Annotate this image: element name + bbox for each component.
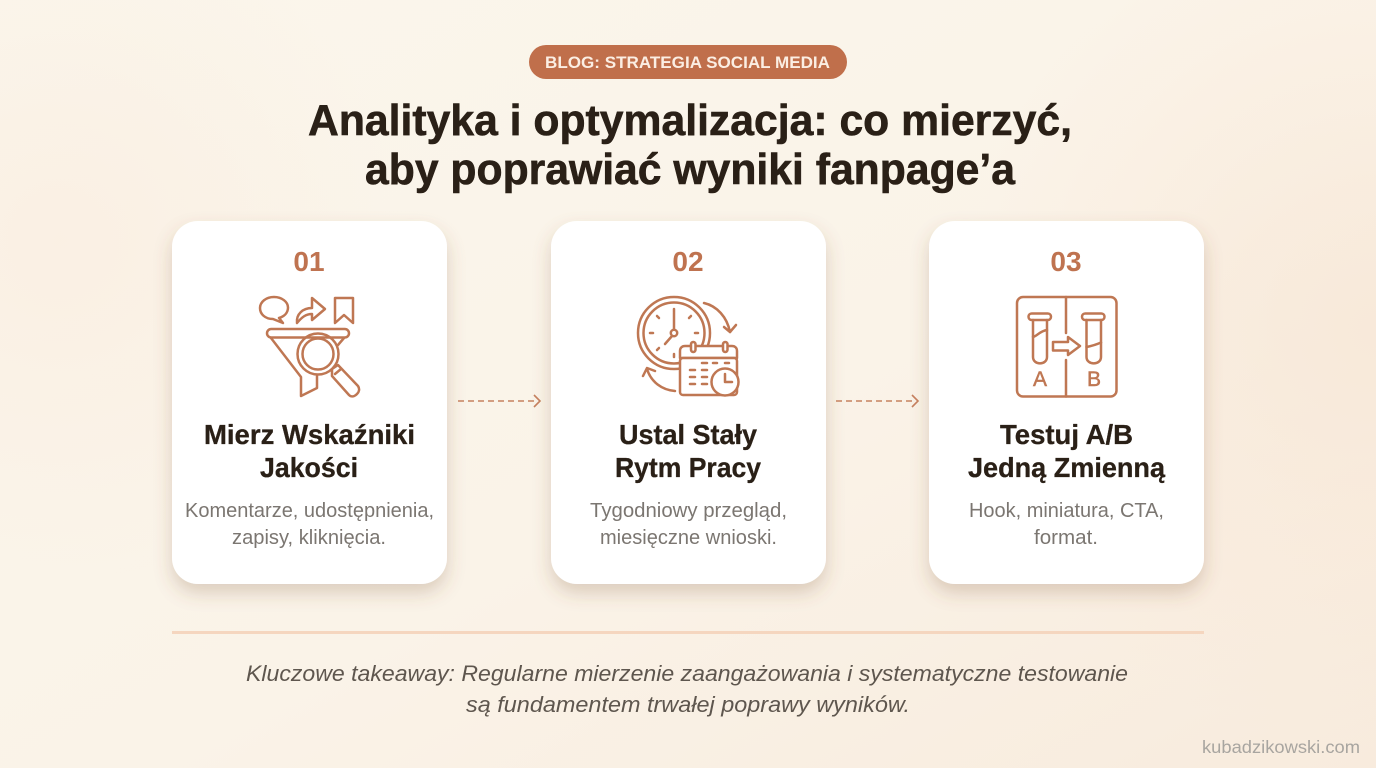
step heading 01: Jakości [260,452,358,483]
title: Analityka i optymalizacja: co mierzyć, [308,96,1072,145]
step heading 01: Mierz Wskaźniki [204,419,415,450]
step description 02: Tygodniowy przegląd, [590,499,787,522]
arrow: step 2 to step 3 [836,395,918,407]
step description 03 [969,499,1164,549]
step heading 03 [968,419,1166,483]
takeaway text: Kluczowe takeaway: Regularne mierzenie zaangażowania i systematyczne testowanie [246,661,1128,686]
icon: clock, calendar and cycle arrows [638,297,738,396]
title: aby poprawiać wyniki fanpage’a [365,145,1016,194]
step heading 02 [615,419,762,483]
step description 01: zapisy, kliknięcia. [232,526,386,549]
icon letters A and B: A [1033,368,1047,391]
panel: step 03 [929,221,1204,584]
step heading 02: Ustal Stały [619,419,758,450]
icon: A/B test tubes [1017,297,1116,396]
icon: funnel with magnifier and engagement symbols [260,297,359,396]
step number 03: 03 [1050,246,1082,277]
takeaway text [246,661,1128,717]
icon letters A and B [1033,368,1101,391]
badge: blog category [529,45,847,79]
takeaway text: są fundamentem trwałej poprawy wyników. [466,692,910,717]
step description 02: miesięczne wnioski. [600,526,777,549]
footer: website: kubadzikowski.com [1202,737,1360,757]
title [308,96,1072,194]
step heading 03: Testuj A/B [1000,419,1133,450]
step description 03: format. [1034,526,1098,549]
step description 03: Hook, miniatura, CTA, [969,499,1164,522]
step description 02 [590,499,787,549]
step heading 02: Rytm Pracy [615,452,762,483]
step description 01: Komentarze, udostępnienia, [185,499,434,522]
step number 02: 02 [672,246,704,277]
step heading 01 [204,419,415,483]
step description 01 [185,499,434,549]
panel: step 02 [551,221,826,584]
icon letters A and B: B [1087,368,1101,391]
badge: blog category: BLOG: STRATEGIA SOCIAL MEDIA [545,54,830,72]
step heading 03: Jedną Zmienną [968,452,1166,483]
arrow: step 1 to step 2 [458,395,540,407]
step number 01: 01 [293,246,325,277]
panel: step 01 [172,221,447,584]
